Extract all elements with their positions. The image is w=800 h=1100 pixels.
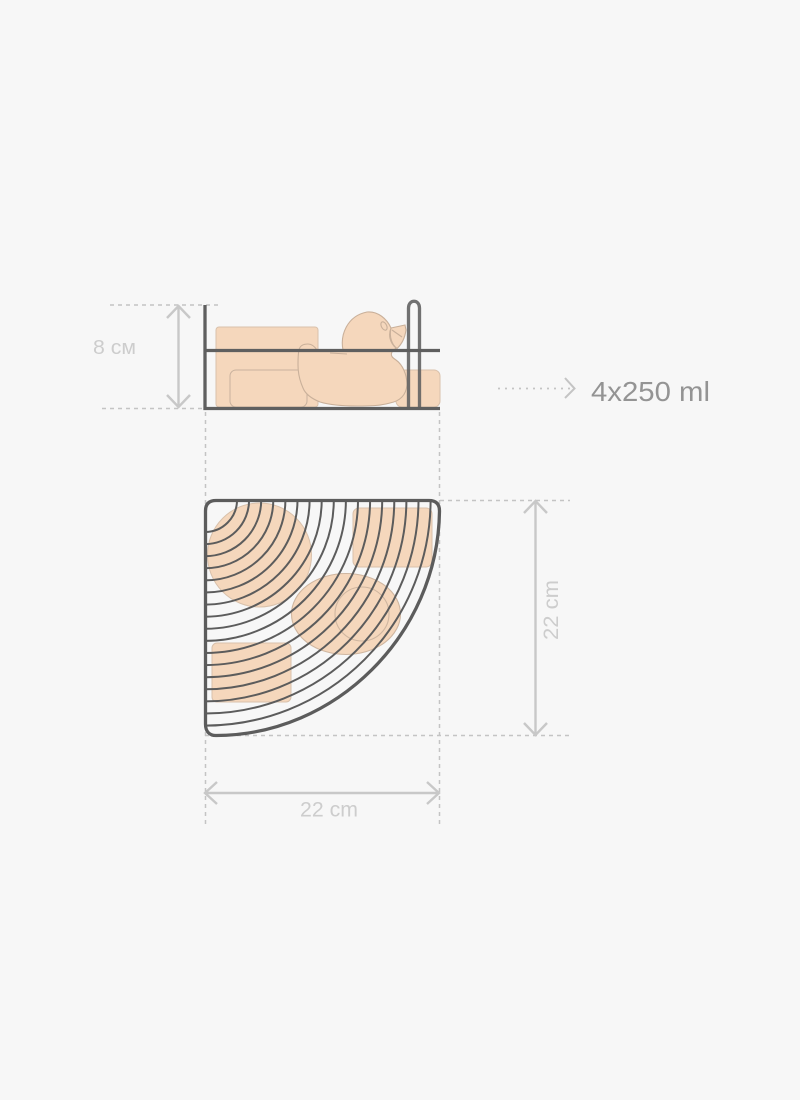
item: right box xyxy=(396,370,440,407)
wire arcs xyxy=(205,500,431,726)
item: small box xyxy=(230,370,307,407)
item: large box xyxy=(216,327,318,407)
dimension: width 22 cm xyxy=(205,782,439,822)
item: duck from above xyxy=(292,574,400,654)
shelf frame top view xyxy=(206,500,440,736)
icon: rubber duck xyxy=(298,312,407,406)
capacity callout xyxy=(498,376,710,407)
item: rectangular box xyxy=(353,508,432,567)
shelf frame side view xyxy=(205,301,440,408)
dimension: height 8 cm: 8 см xyxy=(93,337,136,359)
dimension: depth 22 cm: 22 cm xyxy=(540,580,563,640)
top view: shelf with items xyxy=(205,500,440,736)
item: round soap xyxy=(208,503,312,607)
dimension: depth 22 cm xyxy=(524,501,563,735)
dimension: height 8 cm xyxy=(93,306,190,407)
item: square box xyxy=(212,643,291,702)
dimension: width 22 cm: 22 cm xyxy=(300,798,358,822)
capacity callout: 4x250 ml xyxy=(591,376,710,407)
side view: shelf with items xyxy=(205,301,440,408)
